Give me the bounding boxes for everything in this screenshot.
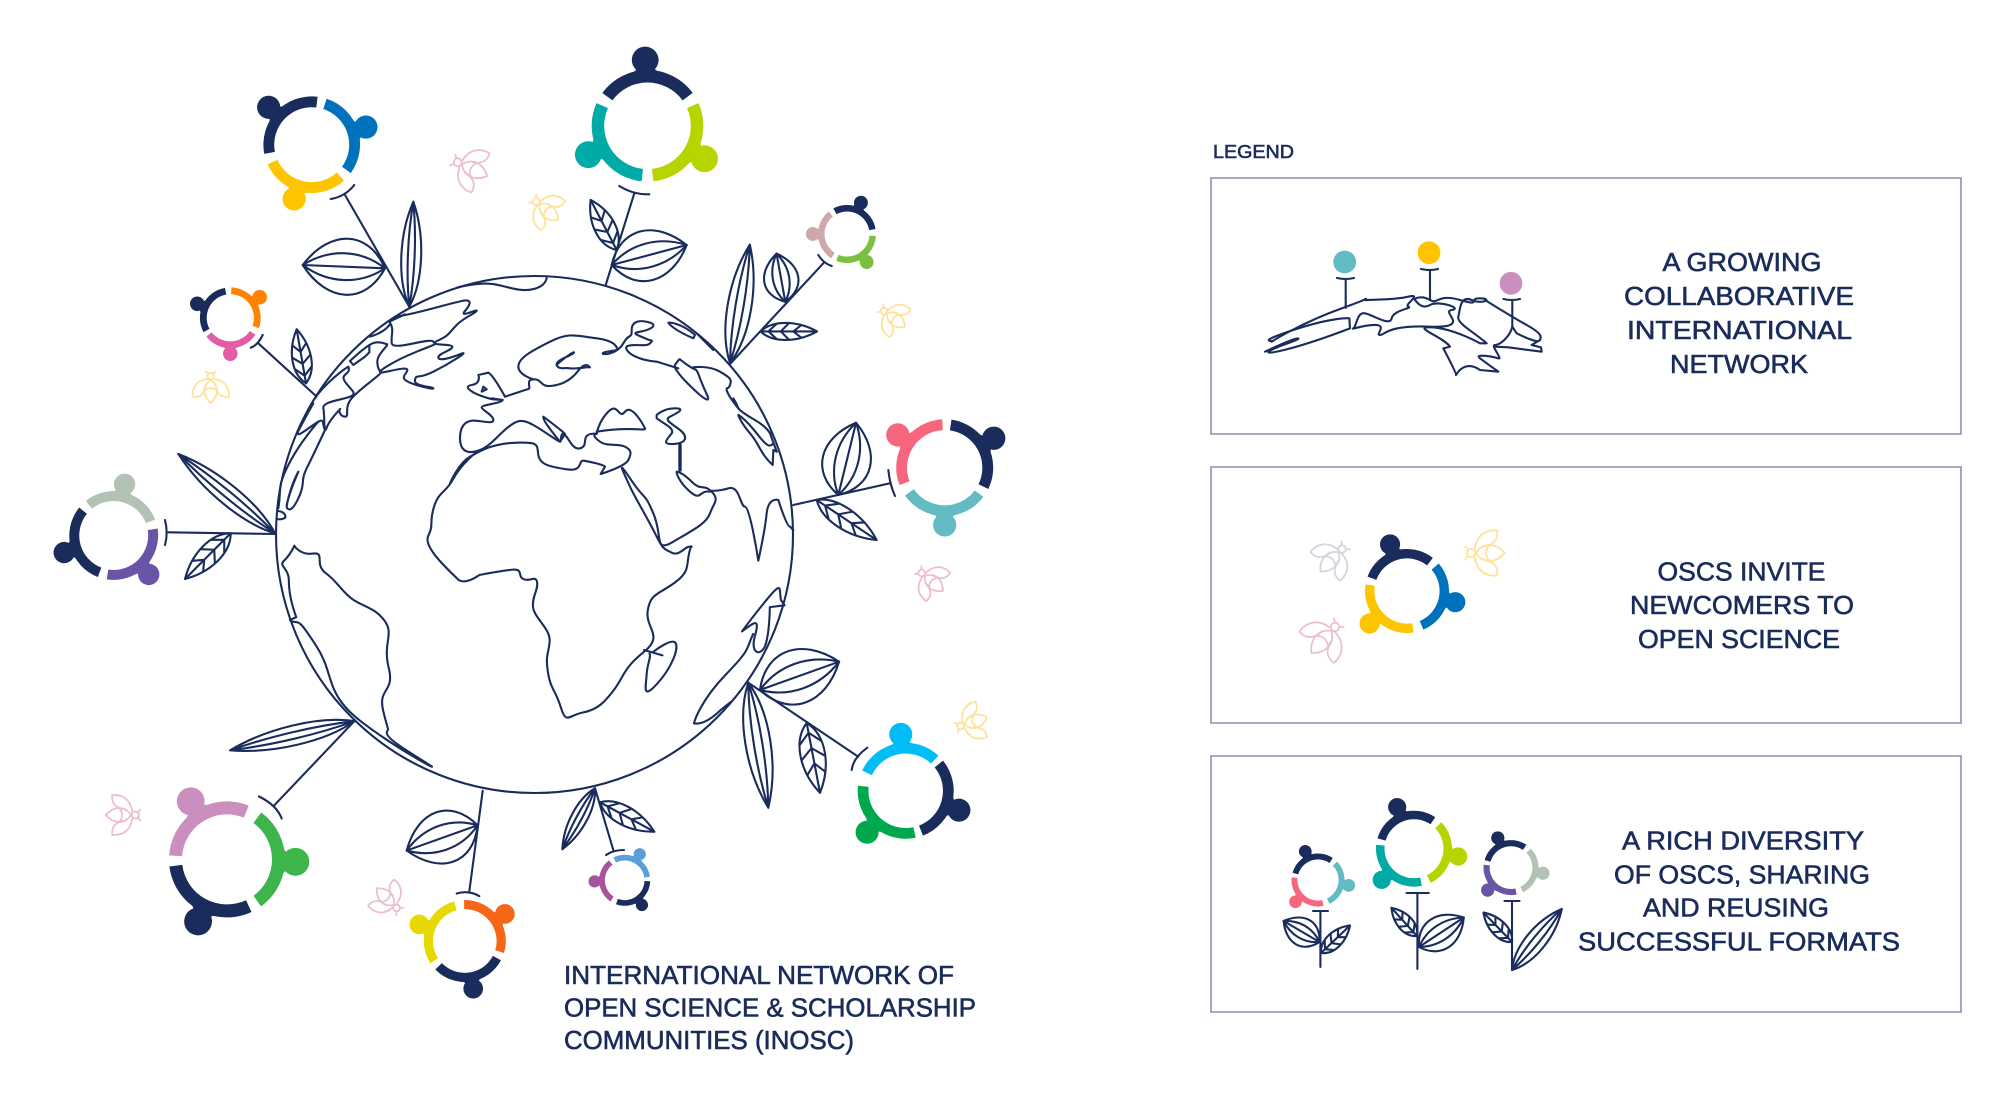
- land: italy: [543, 417, 565, 442]
- flower: sage purple navy ring, left: [50, 446, 281, 592]
- ring: [50, 471, 171, 592]
- flower: large: [1366, 795, 1473, 969]
- legend text: A GROWING: [1662, 247, 1822, 277]
- legend text: NETWORK: [1670, 349, 1809, 379]
- stem: [595, 788, 624, 855]
- ring: [845, 722, 974, 852]
- stem: [331, 185, 410, 308]
- land: south america: [282, 546, 432, 767]
- flower: navy lime teal ring, top: [569, 46, 724, 289]
- leaf: narrow: [172, 446, 281, 541]
- leaf: pod: [751, 636, 848, 715]
- ring: [156, 781, 310, 941]
- ring: [187, 280, 271, 361]
- land: sliver along edge: [370, 314, 405, 337]
- ring: [406, 890, 519, 1000]
- legend text: AND REUSING: [1643, 892, 1829, 922]
- continents: asia: [622, 323, 793, 561]
- flower: navy orange pink ring, upper left: [187, 280, 316, 396]
- land: north african coast: [450, 433, 631, 483]
- land: baltic and north europe: [505, 352, 590, 397]
- flower: cyan navy green ring, lower right: [736, 636, 974, 852]
- land: southeast asia: [694, 634, 753, 724]
- land: east coast: [693, 367, 777, 452]
- leaf: veined: [795, 721, 832, 795]
- title: OPEN SCIENCE & SCHOLARSHIP: [564, 992, 976, 1022]
- leaf: pod: [815, 417, 879, 501]
- leaf: narrow: [736, 681, 781, 810]
- leaf: pod: [398, 801, 486, 875]
- land: indonesia: [742, 588, 785, 652]
- flower: right: [1476, 829, 1569, 976]
- legend text: [1624, 247, 1854, 379]
- land: arctic coast: [668, 323, 713, 350]
- ring: [1353, 531, 1468, 645]
- leaf: pod: [302, 237, 386, 296]
- legend text: OPEN SCIENCE: [1638, 624, 1840, 654]
- pin: yellow: [1418, 241, 1440, 300]
- land: caspian: [657, 408, 685, 444]
- panel border: [1211, 178, 1961, 434]
- title: INTERNATIONAL NETWORK OF: [564, 960, 954, 990]
- icon: three flowers: [1277, 795, 1569, 976]
- legend panel: growing network: [1211, 178, 1961, 434]
- stem: [259, 721, 354, 818]
- leaf: narrow: [228, 712, 357, 760]
- leaf: pod: [605, 221, 693, 289]
- bee: pink right: [906, 556, 955, 605]
- legend panel: rich diversity: [1211, 756, 1961, 1012]
- leaf: veined: [581, 195, 626, 255]
- leaf: veined: [811, 491, 882, 549]
- land: northern siberian slit: [675, 359, 708, 400]
- icon: ring with bees: [1294, 530, 1505, 669]
- bee: yellow: [520, 184, 570, 235]
- stem: [748, 683, 867, 770]
- globe outline: [276, 276, 793, 793]
- leaf: pod: [760, 251, 802, 305]
- title: [564, 960, 976, 1055]
- legend text: NEWCOMERS TO: [1630, 590, 1854, 620]
- leaf: veined: [287, 328, 315, 385]
- continents: europe: [450, 321, 678, 483]
- land: korean peninsula: [738, 415, 777, 465]
- land: gulf lower shore: [677, 473, 710, 496]
- map outline: [1265, 296, 1542, 375]
- land: gulf channel: [678, 445, 682, 470]
- land: black sea: [597, 409, 645, 434]
- continents: north west: [277, 300, 477, 519]
- flower: navy blue yellow ring, top left: [250, 83, 423, 308]
- flower: plum blue navy ring, bottom: [555, 785, 659, 914]
- pin: orchid: [1500, 272, 1522, 327]
- legend text: OF OSCS, SHARING: [1614, 860, 1870, 890]
- legend text: COLLABORATIVE: [1624, 281, 1854, 311]
- globe with continents: [276, 276, 793, 793]
- legend text: OSCS INVITE: [1658, 556, 1826, 586]
- legend heading: LEGEND: [1213, 141, 1294, 162]
- legend panel: invite newcomers: [1211, 467, 1961, 723]
- land: britain: [468, 373, 505, 400]
- land: edge sliver: [298, 403, 325, 434]
- legend text: [1630, 556, 1854, 654]
- land: small loop: [733, 398, 738, 408]
- leaf: narrow: [555, 785, 602, 853]
- land: madagascar: [644, 642, 676, 692]
- flower: orchid green navy ring, lower left: [156, 712, 357, 941]
- legend text: [1578, 826, 1900, 956]
- flower: yellow orange navy ring, bottom left: [398, 791, 519, 1000]
- stem: [165, 520, 276, 545]
- land: india: [710, 488, 793, 561]
- icon: map with pins: [1265, 241, 1542, 375]
- land: lower strip: [278, 422, 325, 509]
- land: southern europe coast: [460, 398, 597, 452]
- stem: [730, 255, 832, 364]
- leaf: veined: [596, 794, 659, 840]
- bees around the globe: [106, 140, 993, 924]
- flower: navy green beige ring, upper right: [718, 193, 882, 365]
- leaf: veined: [178, 526, 238, 586]
- continents traced at lower detail: [282, 278, 785, 767]
- legend text: SUCCESSFUL FORMATS: [1578, 926, 1900, 956]
- land: small cape: [277, 511, 285, 519]
- land: arctic cap: [457, 278, 547, 290]
- bee: yellow right: [870, 294, 915, 341]
- bee: yellow lower right: [951, 700, 993, 745]
- land: small inlet: [350, 346, 369, 365]
- ring: [250, 83, 381, 214]
- pin: teal: [1333, 251, 1356, 308]
- legend text: INTERNATIONAL: [1627, 315, 1852, 345]
- panel border: [1211, 756, 1961, 1012]
- leaf: narrow: [399, 201, 423, 307]
- ring: [806, 193, 882, 272]
- bee: pink lower left: [106, 795, 140, 835]
- ring: [588, 845, 656, 914]
- ring: [569, 46, 724, 193]
- stem: [457, 791, 483, 896]
- land: northern mass: [380, 300, 477, 389]
- bees: [1294, 530, 1505, 669]
- bee: pink: [444, 140, 496, 196]
- flower: small: [1277, 843, 1356, 967]
- leaf: veined: [760, 323, 817, 340]
- stem: [606, 186, 649, 285]
- land: scandinavia: [518, 321, 678, 379]
- panel border: [1211, 467, 1961, 723]
- land: africa: [427, 453, 691, 718]
- leaf: narrow: [718, 243, 762, 365]
- bee: yellow left: [193, 372, 229, 403]
- stem: [793, 470, 895, 505]
- flower: coral navy teal ring, right: [793, 408, 1011, 549]
- bee: pink bottom: [364, 875, 413, 924]
- land: arabia: [622, 468, 716, 554]
- ring: [880, 408, 1011, 537]
- stem: [251, 335, 316, 396]
- title: COMMUNITIES (INOSC): [564, 1025, 854, 1055]
- legend text: A RICH DIVERSITY: [1622, 826, 1864, 856]
- land: middle mass: [315, 342, 387, 430]
